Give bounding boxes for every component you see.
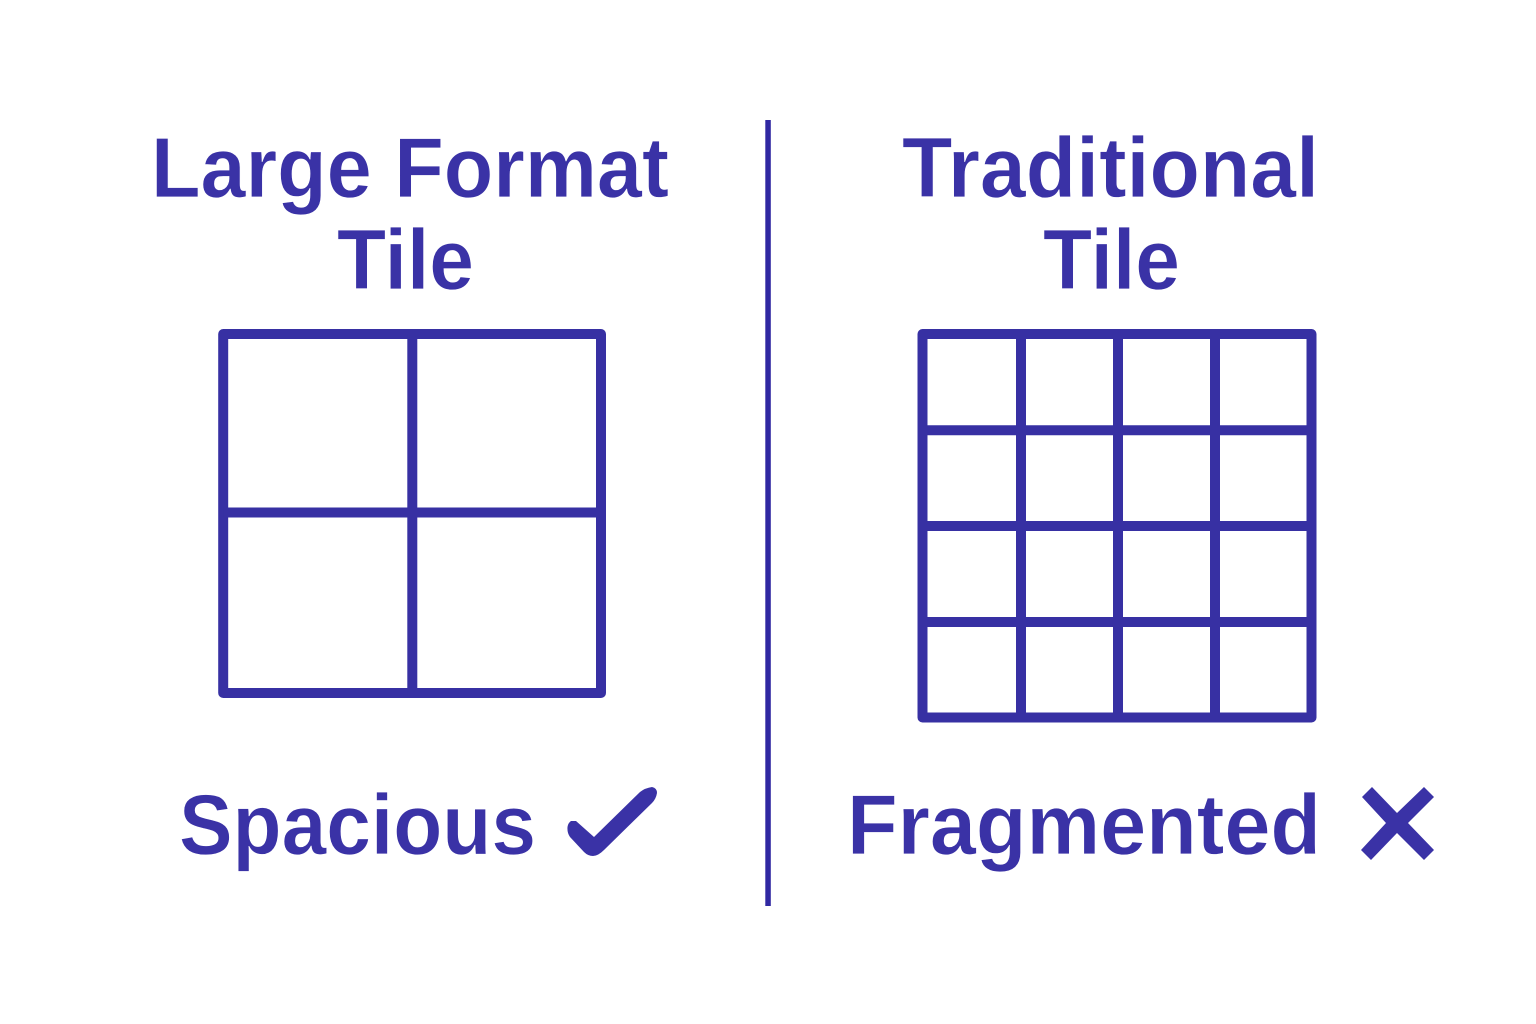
heading: Traditional Tile: Traditional — [902, 121, 1319, 216]
icon: cross mark — [1361, 787, 1434, 860]
traditional tile grid — [922, 334, 1312, 718]
label: Fragmented: Fragmented — [847, 778, 1321, 873]
heading: Large Format Tile: Tile — [337, 213, 474, 308]
label: Spacious: Spacious — [179, 778, 536, 873]
large format tile grid — [223, 334, 601, 693]
center divider line — [765, 120, 771, 906]
heading: Traditional Tile — [902, 121, 1319, 308]
icon: check mark — [567, 787, 657, 856]
heading: Large Format Tile: Large Format — [151, 121, 669, 216]
heading: Traditional Tile: Tile — [1043, 213, 1180, 308]
heading: Large Format Tile — [151, 121, 669, 308]
